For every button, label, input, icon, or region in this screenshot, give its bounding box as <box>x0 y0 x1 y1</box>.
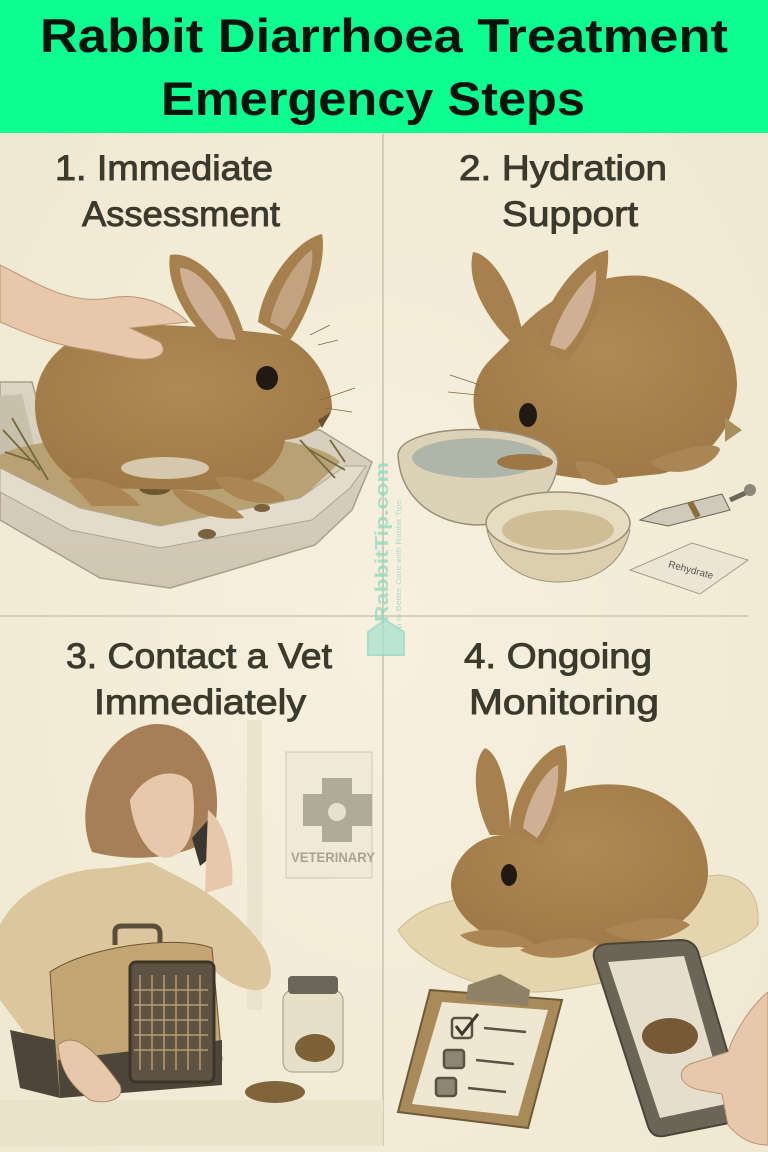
heading: step 2: 2. Hydration <box>459 149 667 188</box>
icon: water bowl <box>398 430 558 525</box>
icon: clipboard checklist <box>398 974 562 1128</box>
icon: sachet: Rehydrate <box>667 559 715 582</box>
icon: rabbit drinking <box>448 250 742 485</box>
heading: step 4: 4. Ongoing <box>464 637 652 676</box>
icon: hand holding phone <box>681 992 768 1145</box>
panel: immediate assessment <box>0 149 372 588</box>
icon: hand on rabbit <box>0 265 188 359</box>
icon: litter tray <box>0 382 372 588</box>
icon: sachet <box>630 543 748 594</box>
title banner <box>0 0 768 133</box>
watermark <box>368 462 404 655</box>
icon: pet carrier <box>10 926 222 1102</box>
heading: step 4 <box>464 637 659 722</box>
heading: step 2: Support <box>502 195 638 234</box>
heading: step 1: 1. Immediate <box>55 149 273 188</box>
watermark: Hop to Better Care with Rabbit Tips <box>396 499 403 640</box>
icon: rabbit in tray <box>35 234 355 519</box>
icon: syringe <box>640 484 756 526</box>
heading: step 3 <box>66 637 332 722</box>
panel: ongoing monitoring <box>398 637 768 1145</box>
watermark: RabbitTip.com <box>372 462 392 622</box>
icon: smartphone <box>594 940 744 1136</box>
title banner: Emergency Steps <box>161 72 585 125</box>
icon: sample jar <box>283 976 343 1072</box>
table <box>0 1100 383 1146</box>
icon: cushion <box>398 875 758 992</box>
icon: droppings <box>245 1081 305 1103</box>
heading: step 4: Monitoring <box>469 683 659 722</box>
icon: woman on phone <box>0 724 271 1040</box>
heading: step 2 <box>459 149 667 234</box>
heading: step 1: Assessment <box>82 195 280 234</box>
heading: step 3: 3. Contact a Vet <box>66 637 332 676</box>
panel: contact a vet <box>0 637 383 1146</box>
heading: step 1 <box>55 149 280 234</box>
icon: resting rabbit <box>451 745 708 958</box>
icon: empty bowl <box>486 492 630 582</box>
heading: step 3: Immediately <box>94 683 307 722</box>
veterinary sign: VETERINARY <box>291 849 376 865</box>
panel: hydration support <box>398 149 756 594</box>
title banner: Rabbit Diarrhoea Treatment <box>40 9 728 62</box>
veterinary sign <box>286 752 376 878</box>
